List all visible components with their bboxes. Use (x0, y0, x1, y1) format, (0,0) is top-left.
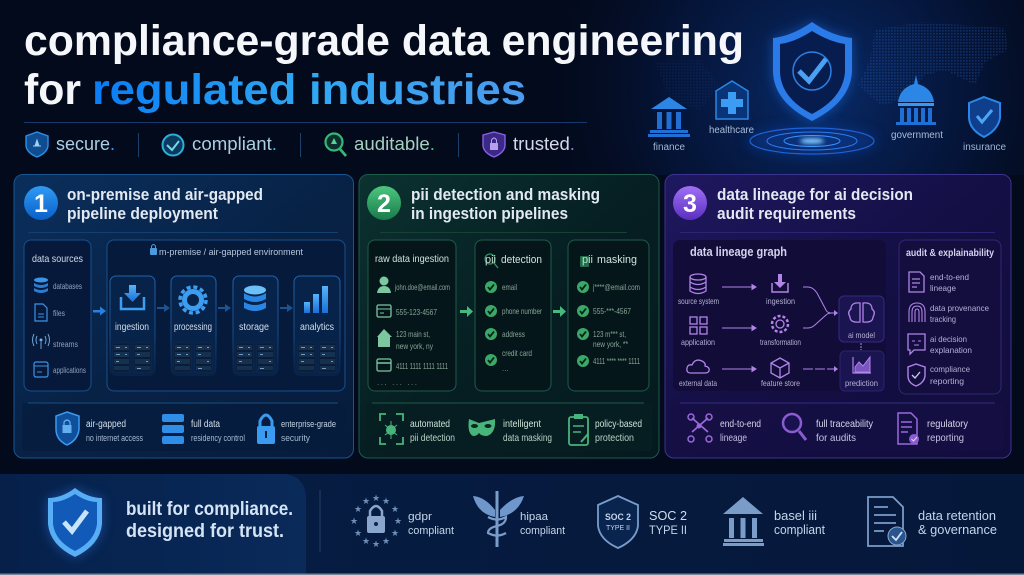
badge: gdpr: ★ (391, 504, 399, 514)
heading 3: audit requirements (717, 205, 856, 223)
badge: gdpr: ★ (372, 539, 380, 549)
badge: gdpr: ★ (350, 516, 358, 526)
source: databases: databases (53, 282, 82, 291)
audit: end-to-end lineage: end-to-end (930, 272, 969, 282)
feature: enterprise-grade security (257, 415, 336, 444)
feature: intelligent data masking: data masking (503, 432, 552, 444)
tagline: built for compliance. (126, 499, 293, 520)
source: files (35, 304, 65, 321)
value: auditable (326, 134, 435, 156)
badge: SOC 2 Type II (598, 496, 687, 548)
badge: data retention and governance: & governance (918, 522, 997, 537)
audit: ai decision explanation: explanation (930, 345, 972, 355)
feature: policy-based protection: policy-based (595, 418, 642, 430)
row: address: 123 main st, (396, 329, 430, 339)
row: address: new york, ny (396, 341, 434, 351)
node: prediction (840, 351, 884, 391)
node: external data (679, 360, 717, 388)
value: compliant: compliant. (192, 134, 277, 154)
pii detection box: credit card (502, 348, 532, 358)
audit: compliance reporting (908, 364, 970, 386)
step: analytics (294, 276, 340, 376)
pii detection box (475, 240, 551, 391)
audit: compliance reporting: compliance (930, 364, 970, 374)
industry: healthcare (709, 81, 754, 136)
feature: end-to-end lineage: end-to-end (720, 418, 761, 430)
badge: gdpr (350, 493, 454, 549)
audit: ai decision explanation (908, 334, 972, 355)
panel 3: data lineage (665, 174, 1011, 458)
feature: automated pii detection: pii detection (410, 432, 455, 444)
environment box: m-premise / air-gapped environment (159, 247, 303, 258)
feature: enterprise-grade security: security (281, 433, 310, 444)
step: storage: storage (239, 321, 269, 333)
industry: finance: finance (653, 142, 685, 153)
tagline (126, 499, 293, 542)
row: email (377, 276, 450, 293)
feature: end-to-end lineage (688, 414, 761, 444)
audit: data provenance tracking (909, 303, 989, 324)
feature: full traceability for audits: for audits (816, 432, 856, 444)
badge: gdpr: gdpr (408, 511, 432, 523)
feature: intelligent data masking (468, 418, 552, 444)
arrow: sources to environment (93, 306, 106, 316)
feature: full traceability for audits: full traceability (816, 418, 874, 430)
tagline: designed for trust. (126, 521, 284, 542)
badge 3: 3 (683, 190, 697, 218)
badge: basel iii (723, 497, 825, 546)
feature: air-gapped: air-gapped (86, 419, 126, 430)
feature: air-gapped: no internet access (86, 433, 143, 443)
title (24, 17, 744, 114)
industry: healthcare: healthcare (709, 125, 754, 136)
pii masking box: 555-***-4567 (593, 306, 631, 316)
industry: insurance: insurance (963, 142, 1006, 153)
platform rings (747, 126, 877, 156)
step: ingestion (110, 276, 155, 376)
feature: automated pii detection: automated (410, 418, 450, 430)
step: processing (171, 276, 216, 376)
badge 1: 1 (34, 190, 48, 218)
step: ingestion: ingestion (115, 321, 149, 333)
pii masking box: 4111 **** **** 1111 (593, 356, 640, 366)
row: card (377, 359, 448, 371)
feature: regulatory reporting (898, 413, 969, 444)
heading 2 (411, 186, 600, 223)
heading 2: in ingestion pipelines (411, 205, 568, 223)
data sources box (24, 240, 91, 391)
feature: automated pii detection (380, 414, 455, 444)
pii masking box (568, 240, 649, 391)
lineage graph box: data lineage graph (690, 245, 787, 259)
feature: policy-based protection (569, 414, 642, 445)
feature: full traceability for audits (783, 414, 874, 444)
bottom shield (48, 488, 102, 557)
source: databases (34, 278, 82, 293)
node: ingestion: ingestion (766, 296, 795, 306)
node: feature store: feature store (761, 378, 800, 388)
audit and explainability box (899, 240, 1001, 394)
value: trusted: trusted. (513, 134, 575, 154)
feature: full data residency control (162, 414, 245, 444)
environment box (107, 240, 345, 391)
arrow (157, 304, 170, 312)
badge: data retention and governance (868, 497, 997, 546)
badge: gdpr: ★ (394, 516, 402, 526)
badge: gdpr: ★ (391, 528, 399, 538)
audit: ai decision explanation: ai decision (930, 334, 967, 344)
badge: SOC 2 Type II: TYPE II (606, 525, 630, 532)
pii detection box: ... (502, 364, 509, 373)
panel 2: pii detection and masking (359, 174, 659, 458)
title: regulated industries (92, 66, 526, 114)
row: card: 4111 1111 1111 1111 (396, 361, 448, 371)
feature: full data residency control: residency control (191, 433, 245, 443)
value: compliant (162, 134, 277, 156)
value: trusted (483, 132, 575, 157)
pii masking box: new york, ** (593, 339, 629, 349)
values row: secure, compliant, auditable, trusted (26, 132, 575, 157)
badge: gdpr: ★ (362, 536, 370, 546)
badge: gdpr: ★ (354, 528, 362, 538)
row: email: john.doe@email.com (394, 282, 450, 292)
industry: government (891, 75, 943, 141)
hero shield with glowing platform (747, 22, 877, 156)
feature: regulatory reporting: reporting (927, 432, 964, 444)
badge 3 (673, 186, 707, 220)
audit and explainability box: audit & explainability (906, 247, 994, 259)
pii detection box: detection (501, 254, 542, 266)
value: secure (26, 132, 115, 157)
heading 3: data lineage for ai decision (717, 186, 913, 204)
audit: compliance reporting: reporting (930, 376, 964, 386)
badge: gdpr: ★ (382, 496, 390, 506)
bottom band (0, 474, 1024, 575)
data sources box: data sources (32, 253, 83, 265)
heading 1 (67, 186, 263, 223)
feature: policy-based protection: protection (595, 432, 634, 444)
title: compliance-grade data engineering (24, 17, 744, 65)
feature: end-to-end lineage: lineage (720, 432, 747, 444)
step: storage (233, 276, 278, 376)
badge: gdpr: compliant (408, 525, 454, 537)
badge: data retention and governance: data retention (918, 508, 996, 523)
arrows to ai model (803, 287, 861, 369)
badge 2: 2 (377, 190, 391, 218)
node: transformation (760, 316, 801, 347)
pii detection box: pii (485, 254, 496, 266)
world map dots (655, 22, 1008, 110)
badge: SOC 2 Type II: TYPE II (649, 523, 687, 537)
raw data ingestion box (368, 240, 456, 391)
badge: basel iii: compliant (774, 523, 825, 537)
arrows from sources (722, 284, 756, 372)
strip 3 (672, 402, 1004, 451)
source: streams (32, 334, 78, 349)
node: external data: external data (679, 378, 717, 388)
badge: gdpr: ★ (382, 536, 390, 546)
badge: gdpr: ★ (372, 493, 380, 503)
node: ai model (839, 296, 884, 342)
feature: regulatory reporting: regulatory (927, 418, 969, 430)
audit: end-to-end lineage (909, 272, 969, 293)
badge: SOC 2 Type II: SOC 2 (649, 508, 687, 523)
strip 1 (22, 402, 346, 451)
audit: end-to-end lineage: lineage (930, 283, 956, 293)
heading 1: on-premise and air-gapped (67, 186, 263, 204)
node: prediction: prediction (845, 378, 878, 388)
value: secure: secure. (56, 134, 115, 154)
feature: air-gapped (56, 412, 143, 445)
step: processing: processing (174, 321, 212, 333)
node: source system: source system (678, 296, 719, 306)
lineage graph box (673, 240, 886, 391)
node: application: application (681, 337, 715, 347)
badge: basel iii: basel iii (774, 509, 817, 523)
feature: intelligent data masking: intelligent (503, 418, 541, 430)
source: files: files (53, 309, 65, 318)
badge 2 (367, 186, 401, 220)
strip 2 (366, 402, 652, 451)
arrow: raw to detection (460, 306, 473, 317)
raw data ingestion box: ... ... ... (377, 378, 417, 387)
node: ingestion (766, 274, 795, 306)
badge: SOC 2 Type II: SOC 2 (605, 512, 631, 522)
pii masking box: masking (597, 254, 637, 266)
industry: insurance (963, 97, 1006, 153)
pii detection box: address (502, 329, 525, 339)
source: applications: applications (53, 366, 86, 375)
source: applications (34, 362, 86, 377)
feature: full data residency control: full data (191, 419, 220, 430)
node: ai model: ai model (848, 330, 875, 340)
pii detection box: email (502, 282, 517, 292)
industry: finance (648, 97, 690, 153)
badge: gdpr: ★ (354, 504, 362, 514)
row: phone: 555-123-4567 (396, 307, 437, 317)
arrow (218, 304, 231, 312)
pii masking box: j****@email.com (592, 282, 640, 292)
panel 1: on-premise and air-gapped (14, 174, 354, 458)
badge: hipaa: hipaa (520, 511, 549, 523)
node: feature store (761, 358, 800, 388)
arrow: detection to masking (553, 306, 566, 317)
heading 2: pii detection and masking (411, 186, 600, 204)
badge 1 (24, 186, 58, 220)
node: source system (678, 274, 719, 306)
badge: hipaa (473, 491, 565, 547)
feature: enterprise-grade security: enterprise-grade (281, 419, 336, 430)
pii detection box: phone number (502, 306, 542, 316)
title: for (24, 66, 81, 114)
heading 1: pipeline deployment (67, 205, 218, 223)
raw data ingestion box: raw data ingestion (375, 253, 449, 265)
pii masking box: 123 m*** st, (593, 329, 626, 339)
row: phone (377, 305, 437, 317)
row: address (377, 329, 434, 351)
audit: data provenance tracking: data provenance (930, 303, 989, 313)
step: analytics: analytics (300, 321, 334, 333)
pii masking box: pii (582, 254, 593, 266)
audit: data provenance tracking: tracking (930, 314, 956, 324)
node: application (681, 317, 715, 347)
badge: hipaa: compliant (520, 525, 565, 537)
heading 3 (717, 186, 913, 223)
industry: government: government (891, 130, 943, 141)
arrow (280, 304, 293, 312)
node: transformation: transformation (760, 337, 801, 347)
badge: gdpr: ★ (362, 496, 370, 506)
source: streams: streams (53, 340, 78, 349)
value: auditable: auditable. (354, 134, 435, 154)
